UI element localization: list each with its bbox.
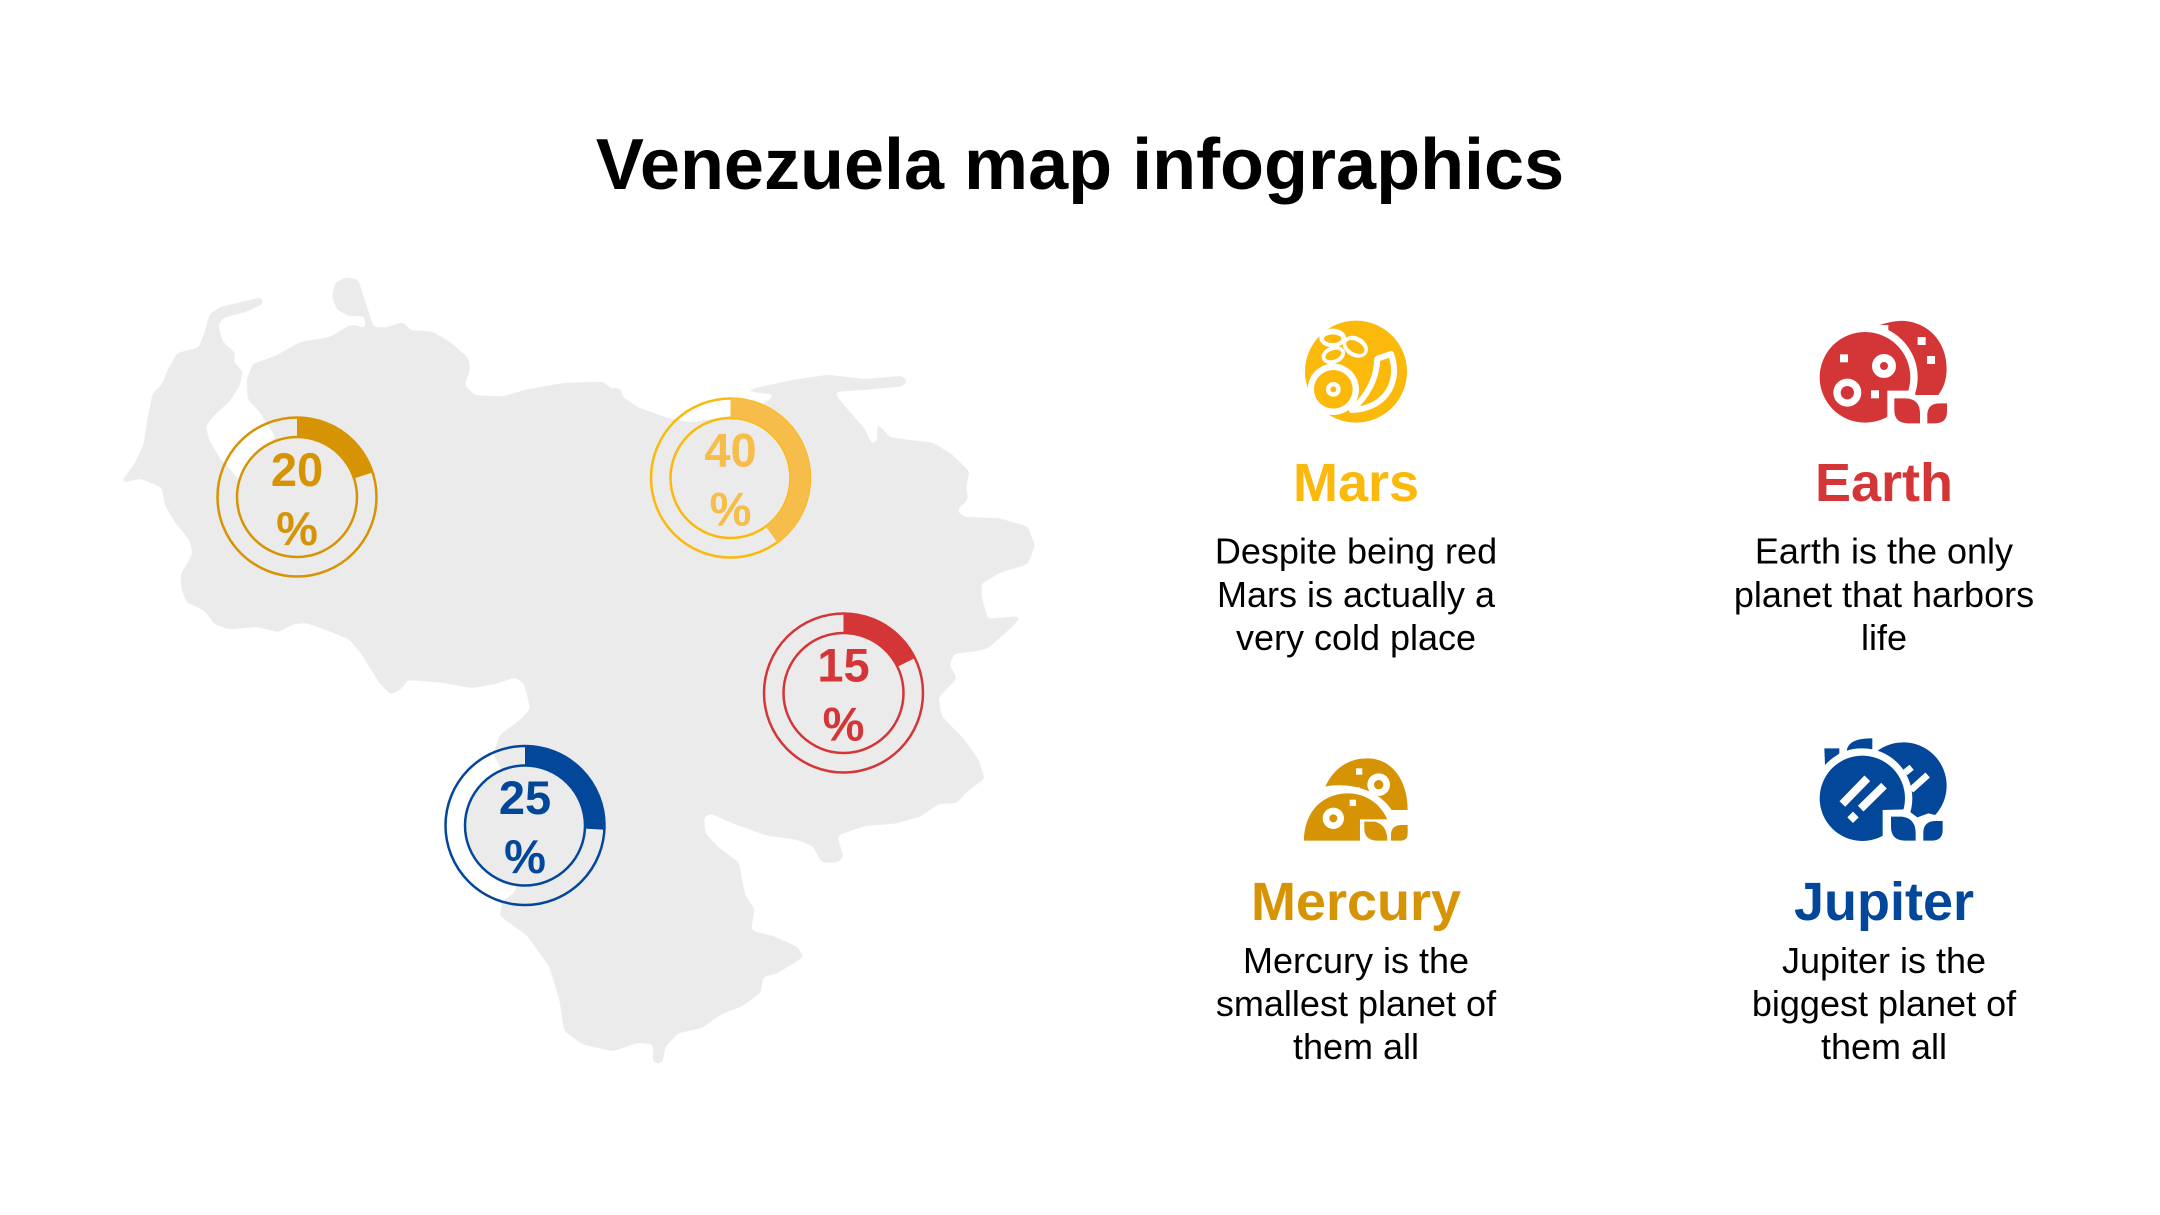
map: Venezuela (120, 277, 1035, 1063)
text: Earth description: Earth is the only (1755, 530, 2013, 572)
text: Earth description: planet that harbors (1734, 574, 2034, 615)
panel: Mercury (1216, 758, 1497, 1067)
panel: Jupiter (1752, 738, 2017, 1067)
panel: Mars (1215, 321, 1497, 658)
text: Jupiter description: biggest planet of (1752, 983, 2017, 1024)
donut: 20% (218, 417, 376, 576)
donut: 40% (651, 398, 810, 558)
text: Mars description: very cold place (1236, 617, 1476, 658)
text: Mercury description: them all (1293, 1026, 1419, 1067)
title: Venezuela map infographics (596, 125, 1564, 205)
icon: Earth (1812, 321, 1950, 430)
heading: Jupiter: Jupiter (1794, 872, 1974, 932)
donut: 20%: % (276, 502, 318, 555)
donut: 40%: 40 (704, 424, 757, 476)
icon: Jupiter (1812, 738, 1947, 848)
heading: Earth: Earth (1815, 453, 1953, 513)
text: Mars description: Mars is actually a (1217, 574, 1496, 615)
text: Jupiter description: them all (1821, 1026, 1947, 1067)
text: Mars description: Despite being red (1215, 530, 1497, 572)
text: Mercury description: smallest planet of (1216, 983, 1497, 1024)
panel: Earth (1734, 321, 2034, 658)
icon: Mars (1305, 321, 1407, 423)
icon: Mercury (1300, 758, 1411, 845)
heading: Mars: Mars (1293, 453, 1419, 513)
heading: Mercury: Mercury (1251, 872, 1461, 932)
text: Jupiter description: Jupiter is the (1782, 940, 1986, 981)
donut: 15% (764, 613, 923, 772)
donut: 15%: 15 (817, 638, 870, 692)
donut: 25%: % (504, 830, 546, 883)
donut: 25%: 25 (499, 771, 551, 824)
text: Earth description: life (1861, 617, 1907, 658)
donut: 20%: 20 (271, 443, 323, 496)
donut: 25% (446, 746, 605, 905)
text: Mercury description: Mercury is the (1243, 940, 1469, 981)
donut: 15%: % (823, 698, 864, 750)
donut: 40%: % (710, 482, 751, 536)
